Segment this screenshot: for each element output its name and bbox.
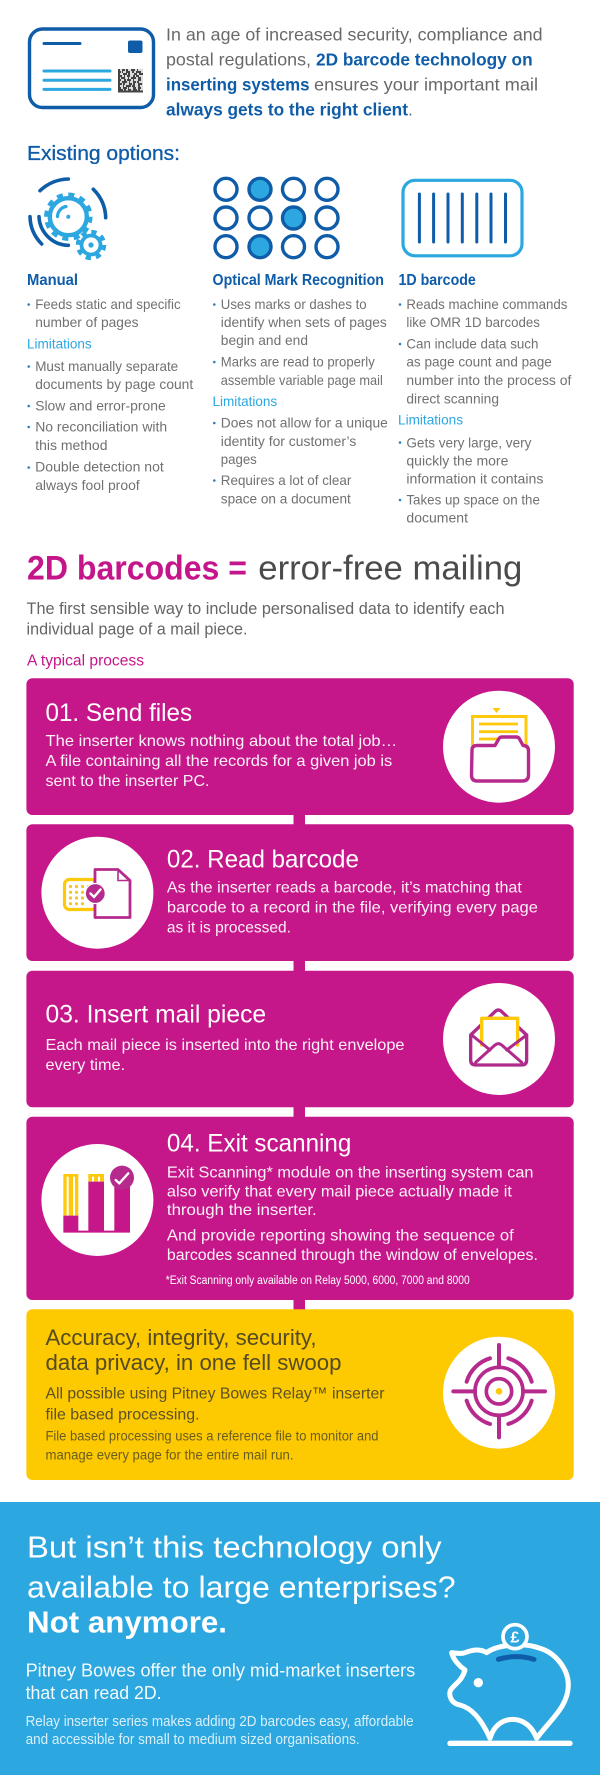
- step 02 body: as it is processed.: [167, 920, 291, 937]
- column: Optical Mark Recognition: identity for customer’s: [221, 433, 356, 449]
- column: 1D barcode: Takes up space on the: [406, 492, 540, 508]
- intro text: inserting systems: [166, 75, 310, 95]
- column: Manual: number of pages: [35, 314, 139, 330]
- column: Optical Mark Recognition: Does not allow for a unique: [221, 415, 388, 431]
- step 04 body: And provide reporting showing the sequence of: [167, 1228, 514, 1245]
- column: Optical Mark Recognition: Optical Mark Recognition: [212, 272, 384, 289]
- subheading text: individual page of a mail piece.: [26, 621, 248, 639]
- heading: 2D barcodes = error-free mailing: [27, 549, 522, 587]
- column: 1D barcode: direct scanning: [406, 390, 499, 406]
- subheading text: The first sensible way to include personalised data to identify each: [26, 600, 504, 618]
- column: 1D barcode: [398, 272, 572, 526]
- step 04 body: through the inserter.: [167, 1202, 317, 1219]
- panel: step 03 insert mail piece: [26, 971, 574, 1107]
- column: Optical Mark Recognition: Requires a lot of clear: [221, 472, 352, 488]
- column: 1D barcode: Can include data such: [406, 335, 538, 351]
- connector between panels: [294, 810, 305, 1310]
- call to action body: and accessible for small to medium sized organisations.: [26, 1732, 360, 1748]
- call to action heading: [27, 1529, 456, 1640]
- call to action heading: Not anymore.: [27, 1605, 227, 1640]
- column: Manual: always fool proof: [35, 477, 140, 493]
- summary heading: [46, 1325, 342, 1375]
- column: Optical Mark Recognition: Marks are read to properly: [221, 354, 375, 370]
- step 02 body: As the inserter reads a barcode, it’s matching that: [167, 880, 522, 897]
- panel: step 02 read barcode: [26, 824, 574, 961]
- call to action body: Pitney Bowes offer the only mid-market inserters: [26, 1661, 415, 1681]
- step 02 body: [167, 880, 538, 937]
- step 04 footnote: *Exit Scanning only available on Relay 5000, 6000, 7000 and 8000: [166, 1275, 470, 1287]
- step 03 body: Each mail piece is inserted into the right envelope: [46, 1037, 405, 1054]
- summary body: [46, 1385, 385, 1462]
- column: Manual: Manual: [27, 272, 78, 289]
- panel: yellow summary: [26, 1309, 574, 1480]
- intro text: In an age of increased security, compliance and: [166, 25, 543, 45]
- column: Manual: [27, 272, 193, 493]
- panel: step 04 exit scanning: [26, 1117, 574, 1300]
- column: Optical Mark Recognition: begin and end: [221, 332, 308, 348]
- call to action body: [26, 1661, 415, 1748]
- column: Optical Mark Recognition: assemble variable page mail: [221, 372, 383, 388]
- column: 1D barcode: as page count and page: [406, 354, 552, 370]
- column: 1D barcode: document: [406, 510, 468, 526]
- column: 1D barcode: number into the process of: [406, 372, 572, 388]
- step 04 body: [167, 1164, 538, 1264]
- panel: blue call to action: [0, 1502, 600, 1775]
- call to action body: that can read 2D.: [26, 1683, 162, 1703]
- column: Manual: Limitations: [27, 335, 92, 351]
- column: Manual: Double detection not: [35, 459, 164, 475]
- intro text: [166, 25, 543, 120]
- summary body: file based processing.: [46, 1406, 200, 1423]
- icon: manual gears: [30, 179, 106, 258]
- step 04 body: Exit Scanning* module on the inserting system can: [167, 1164, 534, 1181]
- icon: 1D barcode: [403, 180, 522, 256]
- column: Manual: this method: [35, 437, 108, 453]
- column: Manual: No reconciliation with: [35, 419, 167, 435]
- icon: optical mark grid: [215, 178, 338, 258]
- step 02 heading: 02. Read barcode: [167, 846, 359, 874]
- step 03 body: every time.: [46, 1057, 125, 1074]
- label: A typical process: A typical process: [27, 653, 144, 670]
- column: 1D barcode: quickly the more: [406, 452, 509, 468]
- step 04 heading: 04. Exit scanning: [167, 1130, 351, 1158]
- summary heading: Accuracy, integrity, security,: [46, 1325, 316, 1350]
- call to action body: Relay inserter series makes adding 2D barcodes easy, affordable: [26, 1714, 414, 1730]
- column: Optical Mark Recognition: [212, 272, 388, 506]
- step 01 body: A file containing all the records for a given job is: [46, 753, 392, 770]
- icon: barcode matched to page: [41, 837, 153, 949]
- heading: Existing options: Existing options:: [27, 143, 180, 165]
- step 01 body: [46, 733, 397, 790]
- call to action heading: But isn’t this technology only: [27, 1529, 442, 1564]
- heading: 2D barcodes = error-free mailing: error-free mailing: [258, 549, 522, 587]
- panel: step 01 send files: [26, 678, 574, 815]
- step 03 heading: 03. Insert mail piece: [46, 1001, 266, 1029]
- call to action heading: available to large enterprises?: [27, 1569, 456, 1604]
- column: 1D barcode: Limitations: [398, 411, 463, 427]
- column: 1D barcode: Reads machine commands: [406, 296, 567, 312]
- column: Manual: Slow and error-prone: [35, 398, 166, 414]
- icon: scanning bar chart: [41, 1144, 153, 1256]
- intro text: .: [408, 100, 413, 120]
- step 01 body: The inserter knows nothing about the total job…: [46, 733, 397, 750]
- intro text: postal regulations,: [166, 50, 311, 70]
- step 01 heading: 01. Send files: [46, 699, 192, 727]
- subheading text: [26, 600, 504, 639]
- step 03 body: [46, 1037, 405, 1074]
- summary heading: data privacy, in one fell swoop: [46, 1350, 342, 1375]
- summary body: All possible using Pitney Bowes Relay™ inserter: [46, 1385, 385, 1402]
- column: Optical Mark Recognition: identify when sets of pages: [221, 314, 387, 330]
- column: 1D barcode: 1D barcode: [398, 272, 476, 289]
- heading: 2D barcodes = error-free mailing: 2D barcodes =: [27, 549, 247, 587]
- step 01 body: sent to the inserter PC.: [46, 773, 209, 790]
- icon: folder with document: [443, 691, 555, 803]
- icon: piggy bank: £: [511, 1629, 520, 1646]
- summary body: manage every page for the entire mail run.: [46, 1447, 294, 1462]
- step 04 body: also verify that every mail piece actually made it: [167, 1184, 512, 1201]
- intro text: 2D barcode technology on: [316, 50, 533, 70]
- step 04 body: barcodes scanned through the window of envelopes.: [167, 1247, 538, 1264]
- summary body: File based processing uses a reference file to monitor and: [46, 1429, 378, 1444]
- icon: target: [443, 1337, 555, 1449]
- column: Manual: Feeds static and specific: [35, 296, 181, 312]
- column: 1D barcode: like OMR 1D barcodes: [406, 314, 540, 330]
- icon: envelope with 2D barcode: [30, 29, 154, 108]
- step 02 body: barcode to a record in the file, verifying every page: [167, 900, 538, 917]
- intro text: always gets to the right client: [166, 100, 408, 120]
- column: Optical Mark Recognition: Uses marks or dashes to: [221, 296, 367, 312]
- column: Manual: documents by page count: [35, 376, 193, 392]
- column: Manual: Must manually separate: [35, 358, 178, 374]
- icon: piggy bank: [450, 1625, 570, 1743]
- intro text: ensures your important mail: [314, 75, 538, 95]
- column: Optical Mark Recognition: pages: [221, 451, 257, 467]
- column: Optical Mark Recognition: space on a document: [221, 490, 351, 506]
- column: Optical Mark Recognition: Limitations: [212, 393, 277, 409]
- column: 1D barcode: Gets very large, very: [406, 434, 531, 450]
- icon: open envelope: [443, 983, 555, 1095]
- column: 1D barcode: information it contains: [406, 470, 543, 486]
